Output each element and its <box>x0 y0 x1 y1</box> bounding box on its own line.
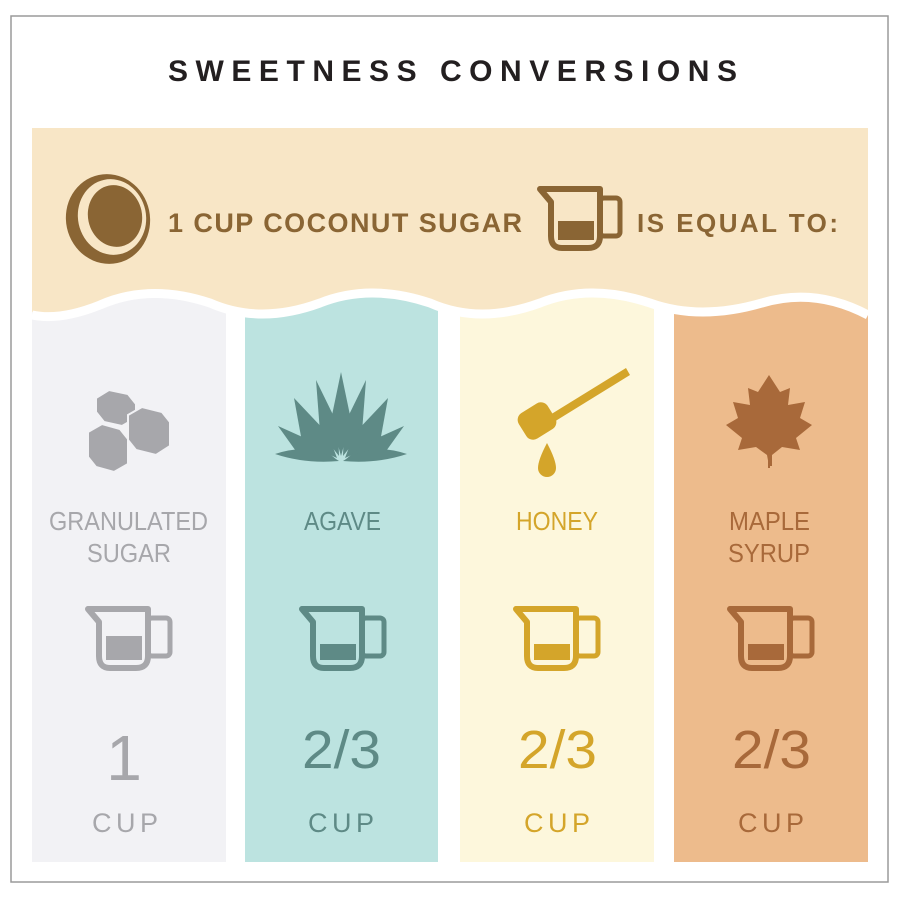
header text: 1 cup coconut sugar: 1 CUP COCONUT SUGAR <box>168 208 522 238</box>
label: agave: AGAVE <box>304 506 381 536</box>
number: 2/3: 2/3 <box>732 720 811 780</box>
panel: header band <box>32 128 868 317</box>
icon: maple leaf <box>726 375 812 468</box>
header text: is equal to: IS EQUAL TO: <box>637 208 838 238</box>
icon: coconut <box>58 166 158 272</box>
unit: cup: CUP <box>308 808 374 838</box>
icon: cup maple <box>730 609 812 668</box>
panel: granulated sugar column: SUGAR <box>87 538 171 568</box>
panel: agave column <box>245 290 438 862</box>
icon: cup honey <box>516 609 598 668</box>
panel: honey column <box>460 290 654 862</box>
icon: cup teal <box>302 609 384 668</box>
icon: sugar cubes <box>88 390 170 472</box>
unit: cup: CUP <box>524 808 590 838</box>
number: 2/3: 2/3 <box>518 720 597 780</box>
unit: cup: CUP <box>738 808 804 838</box>
number: 1: 1 <box>106 722 142 794</box>
icon: honey dipper <box>515 368 630 477</box>
panel: maple syrup column <box>674 290 868 862</box>
number: 2/3: 2/3 <box>302 720 381 780</box>
unit: cup: CUP <box>92 808 158 838</box>
panel: maple syrup column: SYRUP <box>728 538 810 568</box>
title: SWEETNESS CONVERSIONS <box>168 55 737 88</box>
label: granulated sugar: GRANULATED <box>49 506 208 536</box>
label: honey: HONEY <box>516 506 598 536</box>
icon: cup gray <box>88 609 170 668</box>
icon: agave <box>275 372 407 462</box>
icon: cup brown <box>540 189 620 248</box>
label: maple syrup: MAPLE <box>729 506 810 536</box>
panel: granulated sugar column <box>32 290 226 862</box>
